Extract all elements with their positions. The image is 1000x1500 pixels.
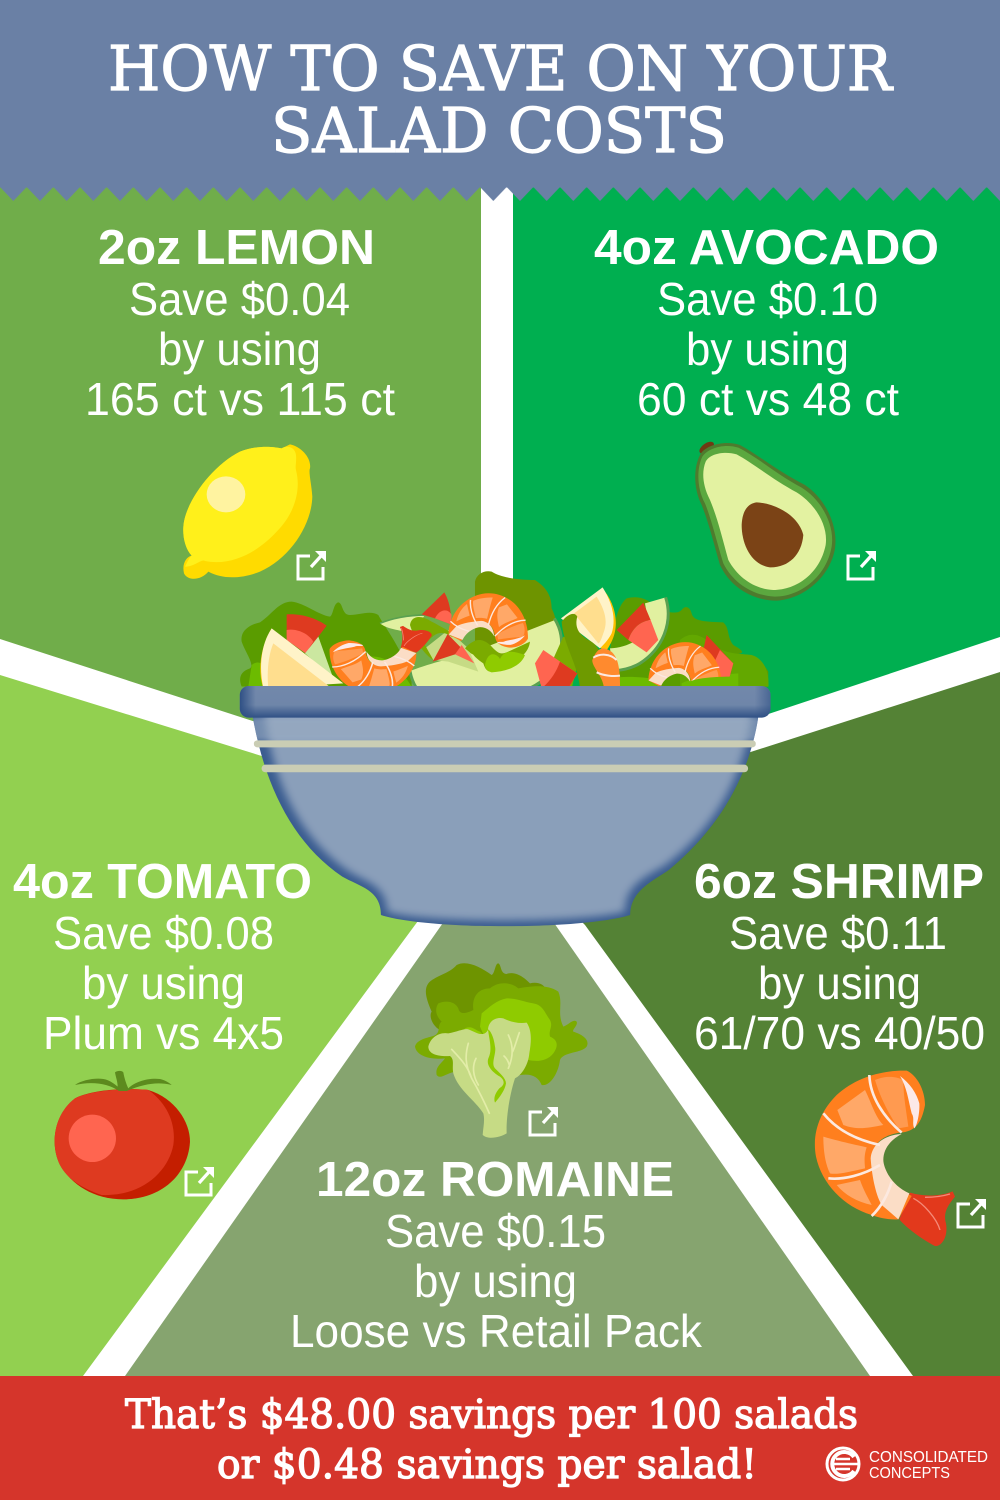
- heading: lemon: 2oz LEMON: [98, 221, 375, 275]
- lemon wedge right: [600, 588, 616, 650]
- avocado center: [410, 620, 562, 690]
- tomato top center: [422, 592, 451, 624]
- icon: shrimp: [815, 1071, 955, 1246]
- icon: link lemon: [298, 551, 326, 579]
- shrimp left: [330, 626, 432, 693]
- icon: lemon: [183, 444, 312, 579]
- tomato right: [617, 603, 651, 640]
- icon: link shrimp: [958, 1199, 986, 1227]
- title: SALAD COSTS: [271, 94, 727, 167]
- text: romaine savings: by using: [414, 1255, 577, 1307]
- lettuce right: [607, 597, 768, 688]
- panel: lemon: [0, 187, 481, 795]
- text: shrimp savings: 61/70 vs 40/50: [694, 1007, 985, 1059]
- right group: [607, 597, 769, 688]
- avocado back: [380, 616, 424, 631]
- footer savings text: That’s $48.00 savings per 100 salads: [125, 1392, 858, 1438]
- tomato center: [433, 634, 462, 662]
- shrimp center: [449, 593, 528, 648]
- panel: avocado: [513, 187, 1000, 799]
- text: shrimp savings: Save $0.11: [729, 907, 947, 959]
- heading: avocado: 4oz AVOCADO: [594, 221, 939, 275]
- text: lemon savings: by using: [158, 323, 321, 375]
- text: tomato savings: [43, 907, 284, 1059]
- text: romaine savings: Save $0.15: [385, 1205, 606, 1257]
- panel: romaine: [125, 920, 870, 1376]
- footer savings text: or $0.48 savings per salad!: [217, 1442, 757, 1488]
- panel: tomato: [0, 675, 430, 1376]
- heading: romaine: 12oz ROMAINE: [316, 1153, 674, 1207]
- header banner: [0, 0, 1000, 201]
- logo: Consolidated Concepts: [827, 1448, 988, 1482]
- heading: shrimp: 6oz SHRIMP: [694, 855, 984, 909]
- logo: Consolidated Concepts: CONSOLIDATED: [869, 1449, 988, 1466]
- logo: Consolidated Concepts: CONCEPTS: [869, 1465, 950, 1482]
- icon: link tomato: [186, 1167, 214, 1195]
- text: romaine savings: [290, 1205, 703, 1357]
- icon: avocado: [695, 439, 835, 601]
- icon: link avocado: [848, 551, 876, 579]
- lettuce top: [475, 571, 556, 652]
- panel: shrimp: [570, 672, 1000, 1376]
- illustration: salad: [240, 571, 769, 693]
- title: [108, 32, 894, 167]
- small shrimp: [592, 648, 620, 688]
- right items: [535, 587, 738, 693]
- text: shrimp savings: [694, 907, 985, 1059]
- tomato center right: [535, 650, 577, 688]
- avocado right: [610, 597, 668, 670]
- icon: link romaine: [530, 1107, 558, 1135]
- text: shrimp savings: by using: [758, 957, 921, 1009]
- text: tomato savings: Plum vs 4x5: [43, 1007, 284, 1059]
- lemon wedge left: [260, 628, 272, 688]
- text: avocado savings: by using: [686, 323, 849, 375]
- heading: tomato: 4oz TOMATO: [13, 855, 312, 909]
- text: romaine savings: Loose vs Retail Pack: [290, 1305, 703, 1357]
- title: HOW TO SAVE ON YOUR: [108, 32, 894, 105]
- shrimp right: [648, 642, 721, 686]
- text: lemon savings: Save $0.04: [129, 273, 350, 325]
- tomato behind right shrimp: [704, 635, 734, 676]
- text: lemon savings: 165 ct vs 115 ct: [85, 373, 395, 425]
- text: avocado savings: Save $0.10: [657, 273, 878, 325]
- footer banner: [0, 1376, 1000, 1500]
- tomato left: [287, 614, 327, 653]
- icon: tomato: [55, 1071, 190, 1199]
- footer savings text: [125, 1392, 858, 1488]
- text: tomato savings: by using: [82, 957, 245, 1009]
- icon: romaine lettuce: [415, 963, 588, 1138]
- lettuce left: [240, 602, 412, 687]
- text: lemon savings: [85, 273, 395, 425]
- text: avocado savings: 60 ct vs 48 ct: [637, 373, 899, 425]
- text: tomato savings: Save $0.08: [53, 907, 274, 959]
- illustration: bowl: [240, 686, 771, 926]
- text: avocado savings: [637, 273, 899, 425]
